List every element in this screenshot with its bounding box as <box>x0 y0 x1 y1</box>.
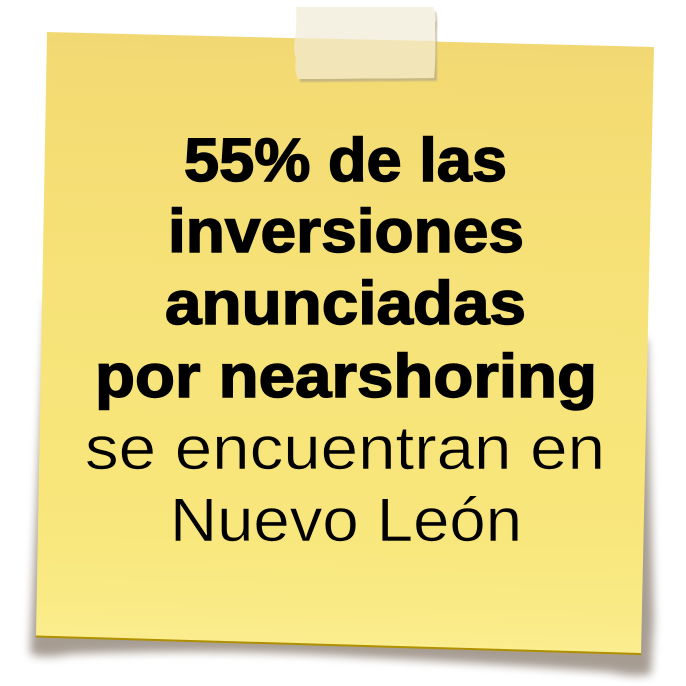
line: por nearshoring: por nearshoring <box>95 342 597 410</box>
line: Nuevo León: Nuevo León <box>170 486 522 554</box>
headline text <box>85 126 605 554</box>
icon: tape <box>294 7 437 82</box>
line: 55% de las: 55% de las <box>184 126 507 194</box>
line: se encuentran en: se encuentran en <box>85 414 605 482</box>
line: inversiones: inversiones <box>168 197 524 265</box>
line: anunciadas: anunciadas <box>165 269 526 337</box>
note shadow <box>30 300 654 676</box>
